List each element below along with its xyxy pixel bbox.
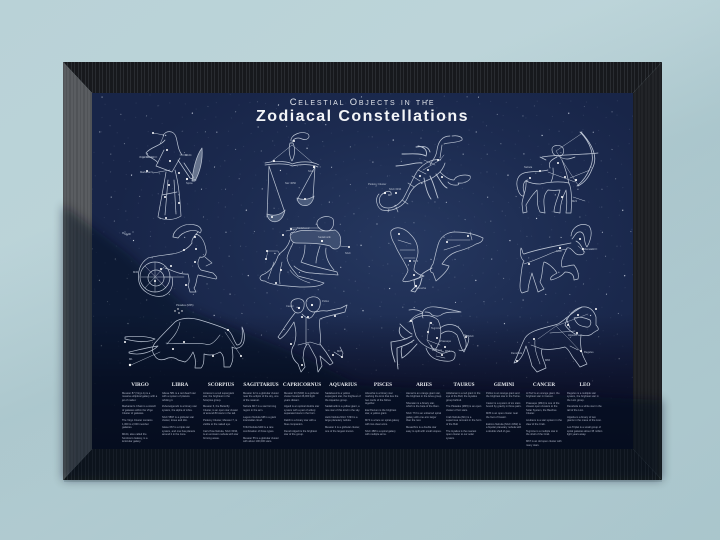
constellation: Leo: Denebola [511, 351, 523, 355]
text column: Aries: NGC 772 is an unbarred spiral galaxy with one arm larger than the rest. [406, 412, 441, 422]
constellation: Aquarius: NGC [345, 251, 351, 255]
constellation: Aries: Sheratan [583, 247, 594, 251]
constellation: Sagittarius [517, 132, 598, 213]
text column: Pisces: Eta Piscium is the brightest star, a yellow giant. [365, 409, 396, 415]
text column: Cancer: M67 is an old open cluster with many stars. [526, 440, 562, 447]
text column: Leo: Regulus is a multiple star system, the brightest star in the Lion group. [567, 392, 599, 402]
text column: Aquarius: Sadalsuud is a yellow supergiant star, the brightest of the Aquarius group. [325, 392, 361, 402]
constellation: Pisces [391, 228, 483, 292]
constellation: Virgo: Markarian's [140, 170, 154, 174]
text column: Sagittarius: Messier 55 is a globular cluster with about 100,000 stars. [243, 437, 279, 443]
constellation: Cancer [391, 307, 474, 369]
text column: Taurus: Crab Nebula (M1) is a supernova remnant in the horn of the Bull. [446, 416, 481, 426]
text column: Virgo: VIRGO [131, 382, 149, 388]
text column: Cancer: CANCER [533, 382, 555, 388]
constellation: Aries: NGC [556, 249, 562, 253]
constellation: Libra: NGC [308, 169, 314, 173]
constellation: Capricornus: M30 [133, 270, 139, 274]
frame shadow on wall [64, 480, 662, 482]
text column: Capricornus: Algedi is an optical double star system with a pair of widely separated stars in the horn. [284, 405, 319, 415]
text column: Scorpius: Cat's Paw Nebula, NGC 6334, is an emission nebula with star forming areas. [203, 430, 238, 440]
constellation: Aquarius: Sadalmelik [318, 235, 331, 239]
constellation: Virgo: Virgo Cluster [139, 155, 154, 159]
constellation: Cancer: Acubens [432, 348, 443, 352]
text column: Gemini: Castor is a system of six stars bound by gravity in three pairs. [486, 402, 521, 408]
constellation: Libra: Nsz 3050 [285, 181, 297, 185]
constellation: Libra [265, 133, 319, 222]
text column: Libra: LIBRA [172, 382, 188, 388]
text column: Virgo: The Virgo Cluster contains 1,300 to 2,000 member galaxies. [122, 419, 153, 429]
text column: Gemini: Pollux is an orange giant and the brightest star in the Twins. [486, 392, 520, 398]
constellation: Leo [511, 307, 598, 372]
text column: Sagittarius [243, 382, 279, 443]
text column: Cancer: Al Tarf is an orange giant, the brightest star in Cancer. [526, 392, 560, 398]
text column: Sagittarius: Messier 22 is a globular cluster near the ecliptic of the sky, one of the nearest. [243, 392, 279, 402]
constellation: Scorpius: Ptolemy Cluster [368, 182, 386, 186]
constellation: Taurus [124, 303, 244, 368]
constellation: Cancer: Praesepe [440, 339, 452, 343]
constellation: Gemini [278, 297, 347, 372]
text column: Capricornus: CAPRICORNUS [283, 382, 321, 388]
text column: Cancer: Praesepe (M44) is one of the closest open clusters to the Solar System, the Beehive Cluster. [526, 402, 559, 415]
text column: Pisces: NGC 488 is a spiral galaxy with multiple arms. [365, 430, 396, 436]
text column: Aquarius [325, 382, 361, 433]
constellation: Aries [520, 224, 597, 293]
text column: Taurus [446, 382, 482, 440]
constellation: Gemini: Castor [286, 304, 294, 308]
text column: Aries: Sheratan is a binary star, which is the beta of the Ram. [406, 402, 439, 408]
text column: Pisces: M74 is a face on spiral galaxy with two clear arms. [365, 419, 399, 426]
text column: Taurus: TAURUS [454, 382, 474, 388]
text column: Cancer: Tegmine is a multiple star in the shell of the Crab. [526, 430, 558, 436]
text column: Leo: LEO [580, 382, 590, 388]
text column: Aries: ARIES [416, 382, 432, 388]
text column: Scorpius: Ptolemy Cluster, Messier 7, is visible to the naked eye. [203, 419, 237, 426]
text column: Aries: Hamal is an orange giant star, the brightest in the Aries group. [406, 392, 442, 398]
text column: Leo: Denebola is a white star in the tail of the Lion. [567, 405, 602, 412]
constellation: Aquarius [260, 217, 351, 287]
text column: Leo: Algieba is a binary of two giants in the mane of the Lion. [567, 416, 602, 422]
text column: Virgo: Markarian's Chain is a stretch of galaxies within the Virgo Cluster of galaxies. [122, 405, 156, 415]
constellation: Scorpius: M7 [388, 193, 392, 197]
text column: Virgo [122, 382, 158, 443]
constellation: Capricornus [124, 224, 217, 296]
text column: Libra: Gliese 581 is a red dwarf star with a system of planets orbiting it. [162, 392, 196, 402]
text column: Capricornus [283, 382, 321, 436]
constellation: Pisces: M74 [413, 259, 419, 263]
title: Zodiacal Constellations: Zodiacal Constellations [256, 108, 469, 125]
text column: Taurus: Aldebaran is a red giant in the eye of the Bull, the Hyades group behind. [446, 392, 480, 402]
wooden picture frame [63, 62, 662, 480]
text column: Aquarius: Helix Nebula NGC 7293 is a large planetary nebula. [325, 416, 357, 422]
text column: Scorpius: Antares is a red supergiant star, the brightest in the Scorpius group. [203, 392, 234, 402]
text column: Pisces: Alrescha is a binary star marking the knot that ties the two cords of the fishes together. [365, 392, 398, 405]
constellation: Virgo: M104 [185, 153, 192, 157]
text column: Libra: Zubenelgenubi is a binary star system, the alpha of Libra. [162, 405, 197, 412]
text column: Scorpius [203, 382, 238, 440]
constellation: Cancer: Tegmine [431, 326, 441, 330]
constellation: Aquarius: Sadalsuud [297, 226, 310, 230]
text column: Gemini: Eskimo Nebula (NGC 2392) is a bipolar planetary nebula with a double shell of gas. [486, 423, 521, 433]
constellation: Pisces: Alrescha [416, 286, 427, 290]
text column: Pisces [365, 382, 400, 436]
constellation: Leo: Algieba [568, 333, 577, 337]
small open cluster beside Capricornus [122, 232, 134, 236]
constellation: Leo: Regulus [584, 350, 594, 354]
text column: Sagittarius: Lagoon Nebula M8 is a giant interstellar cloud. [243, 416, 276, 422]
constellation: Gemini: Pollux [322, 299, 330, 303]
text column: Virgo: Messier 87 (Virgo A) is a massive elliptical galaxy with a jet of matter. [122, 392, 157, 402]
text column: Sagittarius: Nebula M17 is a star forming region in the arm. [243, 405, 276, 412]
constellation: Taurus: Pleiades (M45) [176, 303, 194, 307]
text column: Gemini: M35 is an open cluster near the foot of Castor. [486, 412, 518, 419]
text column: Cancer [526, 382, 562, 447]
text column: Scorpius: Messier 6, the Butterfly Cluster, is an open star cluster of around 80 stars in the tail. [203, 405, 238, 415]
navy star field poster [92, 93, 633, 449]
text column: Capricornus: Deneb Algedi is the brightest star of the group. [284, 430, 317, 436]
constellation: Cancer: NGC [468, 334, 474, 338]
text column: Capricornus: Messier 30 (M30) is a globular cluster located 26,000 light years distant. [284, 392, 319, 402]
constellation: Scorpius [368, 136, 470, 212]
text column: Gemini: GEMINI [494, 382, 514, 388]
constellation: Scorpius: NGC 6334 [389, 187, 402, 191]
text column: Sagittarius: Trifid Nebula M20 is a rare combination of three types. [243, 426, 274, 433]
text column: Cancer: Acubens is a star system in the claw of the Crab. [526, 419, 562, 426]
text column: Aquarius: Sadalmelik is a yellow giant, a rare star of this kind in the sky. [325, 405, 360, 412]
constellation: Gemini: M35 [337, 349, 343, 353]
text column: Taurus: The Hyades is the nearest open cluster to our solar system. [446, 430, 476, 440]
constellation: Virgo [139, 132, 202, 220]
text column: Libra [162, 382, 197, 436]
constellation: Sagittarius: M22 [572, 199, 578, 203]
text column: Virgo: M104, also called the Sombrero Galaxy, is a lenticular galaxy. [122, 433, 147, 443]
sunlight shadow across the frame and poster [63, 205, 662, 480]
text column: Aquarius: AQUARIUS [329, 382, 357, 388]
text column: Gemini [486, 382, 522, 433]
title: Celestial Objects in the: Celestial Objects in the [290, 96, 435, 107]
text column: Aries [406, 382, 442, 433]
constellation: Leo: M66 [545, 358, 551, 362]
constellation: Taurus: M1 [129, 357, 133, 361]
constellation: Cancer: M67 [445, 349, 451, 353]
text column: Scorpius: SCORPIUS [208, 382, 234, 388]
text column: Libra: NGC 5897 is a globular star cluster, loose and dim. [162, 416, 194, 422]
text column: Taurus: The Pleiades (M45) is an open cluster of hot stars. [446, 405, 481, 412]
text column: Capricornus: Dabih is a binary star with a blue companion. [284, 419, 316, 426]
text column: Aries: Mesarthim is a double star easy to split with small scopes. [406, 426, 441, 433]
text column: Libra: Glese 667 is a triple star system, and one has planets around it in the zone. [162, 426, 195, 436]
text column: Leo: Leo Triplet is a small group of spiral galaxies about 35 million light years away. [567, 426, 602, 436]
constellation: Capricornus: NGC [124, 232, 130, 236]
text column: Sagittarius: SAGITTARIUS [243, 382, 279, 388]
constellation: Virgo: Spica [186, 181, 193, 185]
constellation: Sagittarius: Nebula [524, 165, 533, 169]
text column: Pisces: PISCES [374, 382, 392, 388]
text column: Aquarius: Messier 2 is a globular cluster, one of the largest known. [325, 426, 360, 433]
text column: Leo [567, 382, 602, 436]
